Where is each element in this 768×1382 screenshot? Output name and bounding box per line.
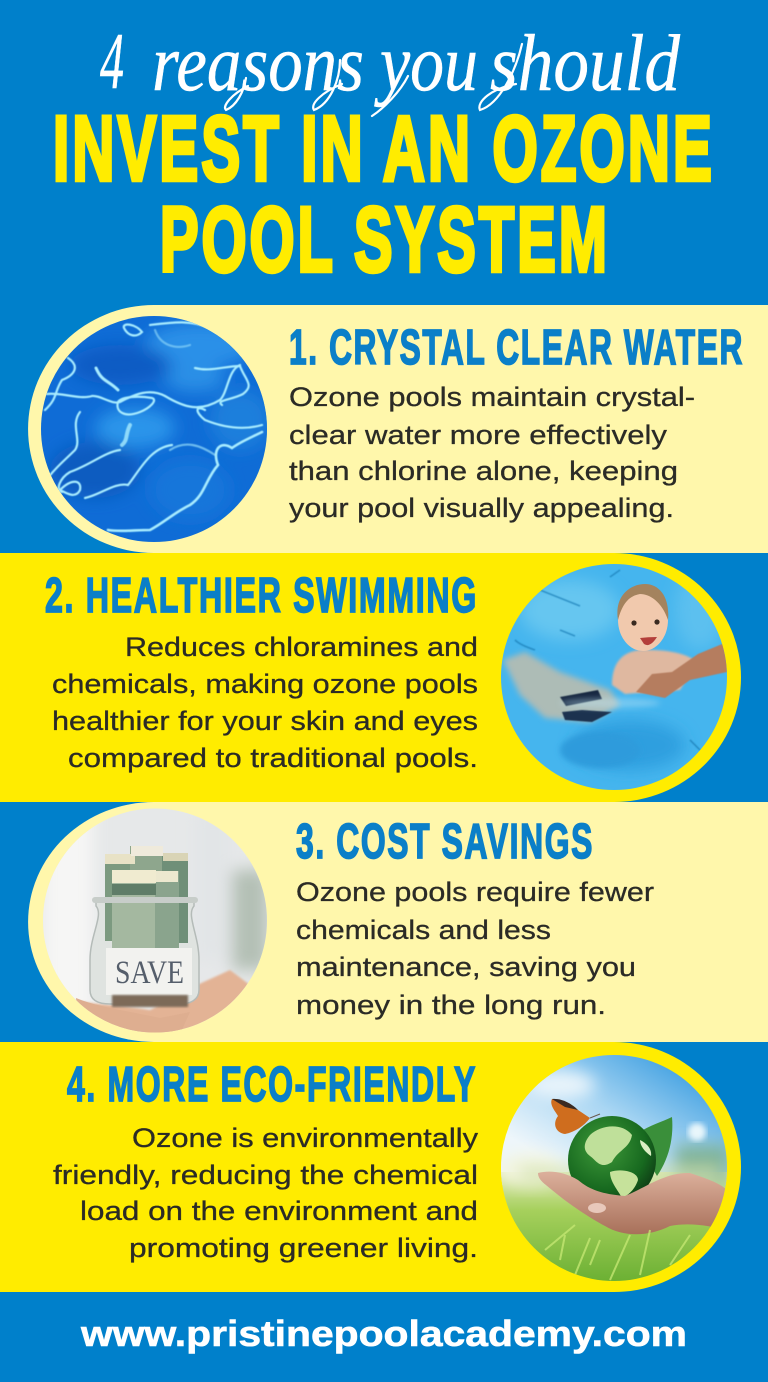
photo: pool water xyxy=(41,316,270,542)
script subtitle xyxy=(100,18,681,116)
body text: friendly, reducing the chemical xyxy=(53,1160,478,1190)
panel: eco friendly xyxy=(0,1042,741,1292)
jar label: SAVE xyxy=(115,955,184,991)
body text: chemicals, making ozone pools xyxy=(52,669,478,699)
body text: Reduces chloramines and xyxy=(125,632,478,662)
legs under water xyxy=(503,652,620,722)
body text: promoting greener living. xyxy=(129,1233,478,1263)
body text xyxy=(289,382,695,523)
script subtitle: you xyxy=(374,20,478,108)
heading: 4. MORE ECO-FRIENDLY xyxy=(67,1058,477,1112)
grass blades xyxy=(545,1225,690,1280)
hand xyxy=(538,1172,727,1234)
sun glow xyxy=(688,1123,706,1141)
panel background xyxy=(0,1042,741,1292)
script subtitle: reasons xyxy=(152,20,364,108)
adult arm and hand xyxy=(636,642,727,698)
leaf xyxy=(644,1117,672,1176)
photo: child swimming xyxy=(501,564,727,790)
water ripples xyxy=(515,570,700,750)
body text: clear water more effectively xyxy=(289,420,668,450)
hand xyxy=(76,969,248,1032)
panel: cost savings xyxy=(28,802,768,1042)
body text: money in the long run. xyxy=(296,990,606,1020)
body text: compared to traditional pools. xyxy=(68,743,478,773)
panel background xyxy=(28,305,768,553)
jar xyxy=(90,900,199,1004)
child body xyxy=(612,650,696,694)
body text: Ozone pools require fewer xyxy=(296,877,654,907)
body text: your pool visually appealing. xyxy=(289,493,674,523)
photo: globe in hand xyxy=(495,1055,730,1282)
panel: healthier swimming xyxy=(0,553,741,802)
child head xyxy=(618,589,668,651)
butterfly xyxy=(551,1099,600,1134)
body text xyxy=(53,1123,479,1263)
body text: maintenance, saving you xyxy=(296,952,636,982)
panel background xyxy=(0,553,741,802)
heading: 3. COST SAVINGS xyxy=(296,815,594,869)
body text: chemicals and less xyxy=(296,915,551,945)
body text xyxy=(52,632,478,773)
website footer: www.pristinepoolacademy.com xyxy=(80,1313,687,1354)
script subtitle: should xyxy=(490,20,681,108)
jar label xyxy=(106,948,192,995)
body text: load on the environment and xyxy=(80,1196,478,1226)
panel: crystal clear water xyxy=(28,305,768,553)
script subtitle: 4 xyxy=(100,18,124,106)
photo: savings jar xyxy=(43,808,268,1040)
body text: Ozone is environmentally xyxy=(132,1123,479,1153)
globe xyxy=(568,1116,656,1204)
main heading xyxy=(53,98,715,291)
heading: 2. HEALTHIER SWIMMING xyxy=(45,569,478,623)
body text xyxy=(296,877,654,1020)
body text: than chlorine alone, keeping xyxy=(289,456,678,486)
title xyxy=(53,18,715,291)
body text: Ozone pools maintain crystal- xyxy=(289,382,695,412)
panel background xyxy=(28,802,768,1042)
body text: healthier for your skin and eyes xyxy=(52,706,478,736)
rolled bills xyxy=(92,846,198,950)
